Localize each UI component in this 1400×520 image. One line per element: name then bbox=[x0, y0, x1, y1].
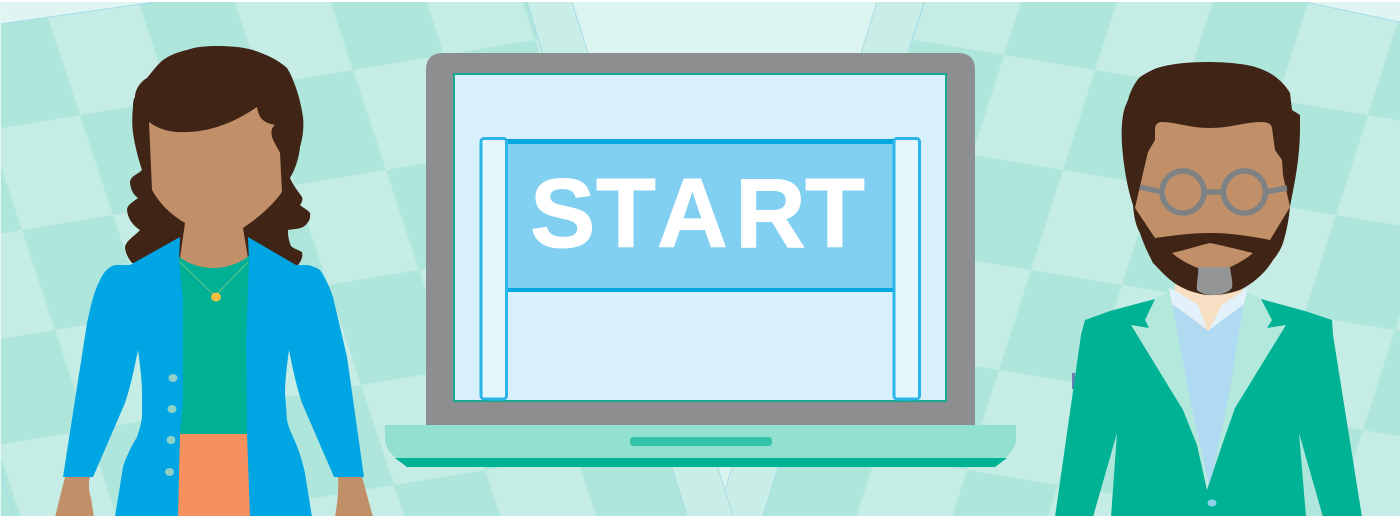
man hair and beard bbox=[1122, 62, 1300, 295]
START label: START bbox=[530, 158, 865, 268]
woman buttons bbox=[165, 374, 178, 476]
woman figure bbox=[55, 46, 373, 517]
woman hair bbox=[125, 46, 310, 265]
man shirt collar bbox=[1169, 288, 1247, 330]
laptop base bbox=[385, 425, 1016, 458]
woman hands bbox=[55, 477, 373, 517]
right banner post bbox=[894, 138, 920, 399]
banner panel bbox=[506, 139, 894, 292]
laptop bbox=[385, 53, 1016, 467]
left banner post bbox=[481, 138, 506, 399]
woman face and neck bbox=[149, 107, 282, 268]
man jacket button bbox=[1208, 500, 1216, 506]
banner bbox=[481, 138, 920, 399]
man jacket lapels bbox=[1131, 291, 1286, 490]
woman necklace bbox=[180, 262, 248, 302]
laptop screen bbox=[454, 74, 946, 401]
man green jacket bbox=[1055, 299, 1362, 517]
laptop base front edge bbox=[395, 458, 1007, 467]
bottom white strip bbox=[0, 516, 1400, 520]
woman blue jacket bbox=[63, 237, 364, 517]
woman green top bbox=[178, 256, 249, 436]
man face bbox=[1135, 122, 1290, 240]
laptop lid bbox=[426, 53, 975, 425]
man figure bbox=[1055, 62, 1362, 517]
man goatee bbox=[1197, 267, 1232, 295]
man glasses bbox=[1140, 171, 1287, 213]
man shirt bbox=[1172, 303, 1244, 490]
man chin bbox=[1172, 243, 1253, 268]
woman orange skirt bbox=[177, 434, 251, 517]
laptop trackpad bbox=[630, 437, 772, 446]
man neck bbox=[1172, 280, 1243, 332]
